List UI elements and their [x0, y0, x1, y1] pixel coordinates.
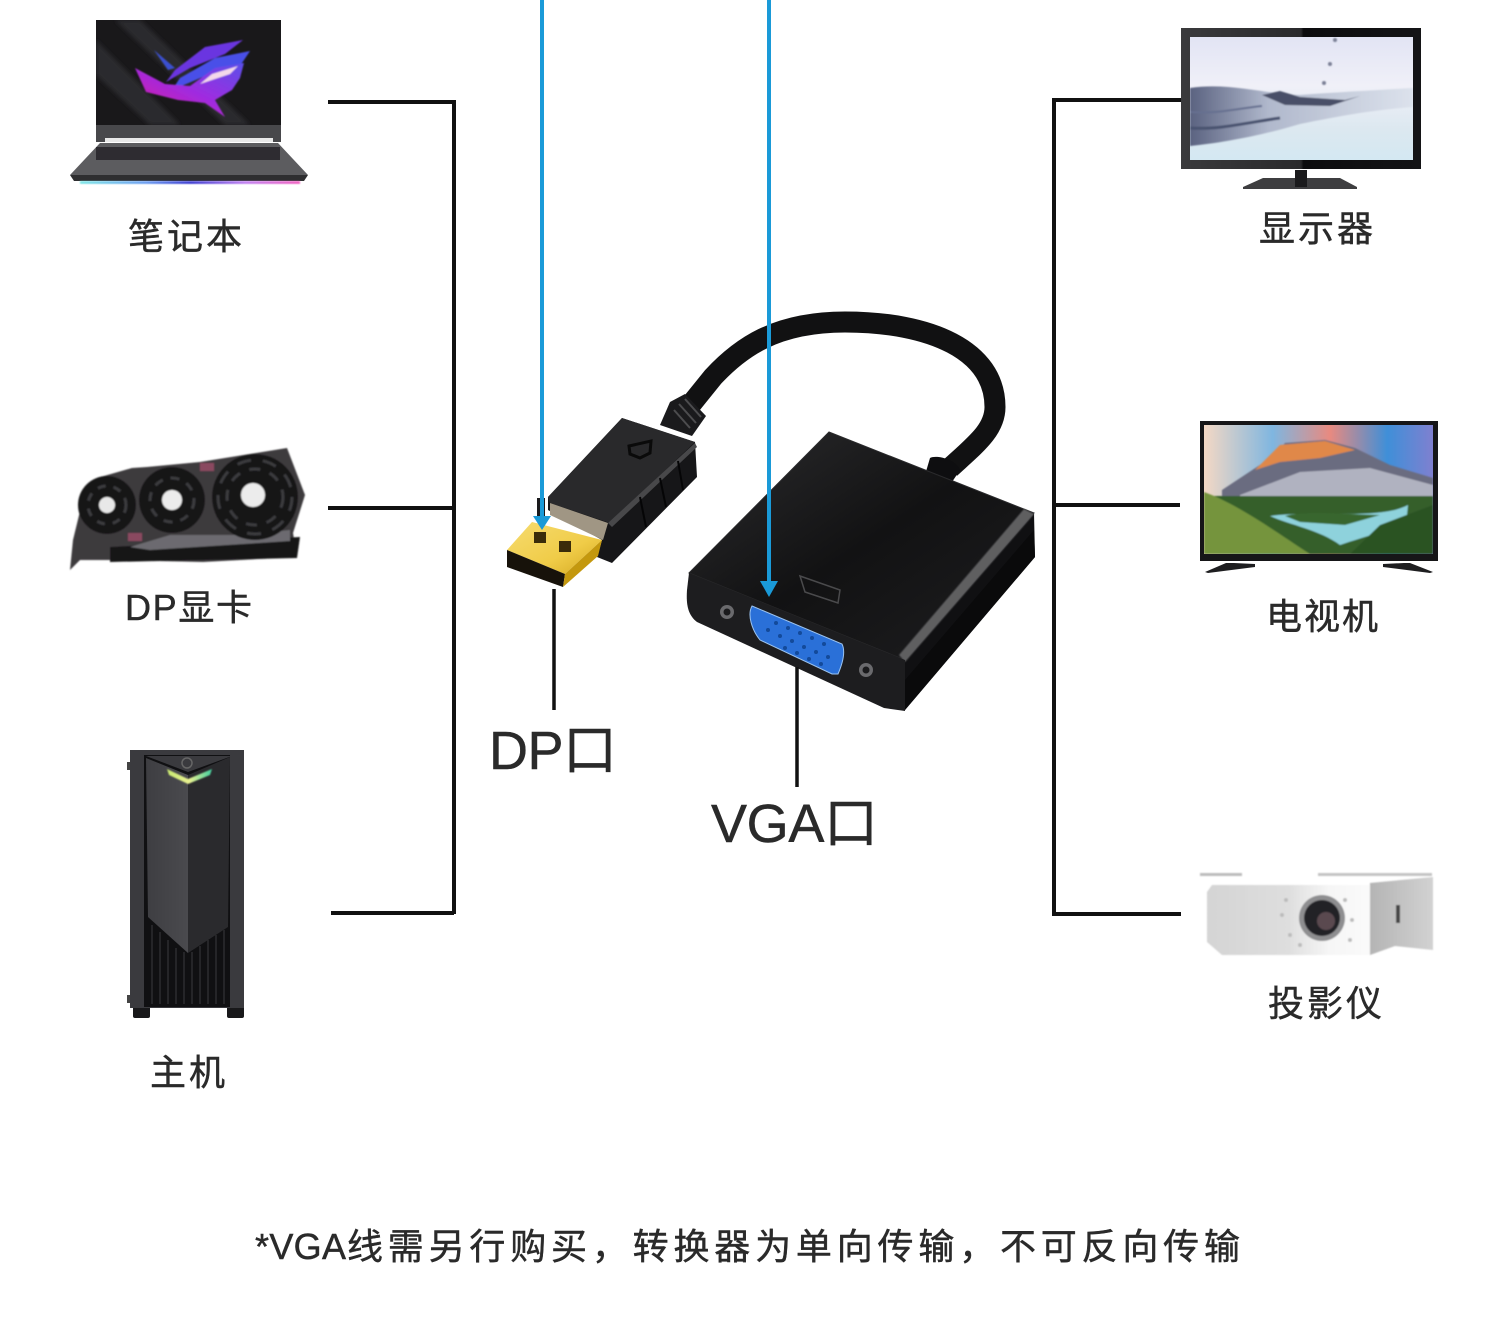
leader line: DP port	[552, 589, 556, 710]
icon: television	[1200, 421, 1438, 573]
label: 主机: 主机	[150, 1052, 225, 1093]
label: 电视机: 电视机	[1266, 596, 1378, 637]
cable	[688, 322, 995, 468]
icon: graphics card	[70, 448, 305, 570]
DP plug	[507, 394, 706, 587]
label: 笔记本: 笔记本	[128, 216, 242, 257]
VGA converter box	[687, 432, 1035, 711]
icon: projector	[1200, 873, 1433, 955]
label: DP显卡: DP显卡	[125, 587, 252, 628]
arrow: to VGA box	[760, 0, 778, 597]
label: 投影仪: 投影仪	[1268, 983, 1382, 1024]
label: VGA口: VGA口	[711, 794, 878, 854]
leader line: VGA port	[795, 667, 799, 787]
product: DP to VGA adapter	[507, 322, 1035, 711]
connector lines: source devices	[328, 102, 454, 914]
footnote: 线需另行购买，转换器为单向传输，不可反向传输	[347, 1226, 1240, 1267]
gold contact	[507, 522, 602, 574]
connector lines: display devices	[1054, 100, 1181, 914]
icon: laptop	[70, 20, 308, 184]
footnote: *VGA	[255, 1226, 346, 1267]
arrow: to DP plug	[533, 0, 551, 530]
icon: desktop tower	[127, 750, 244, 1018]
label: 显示器: 显示器	[1259, 208, 1373, 249]
label: DP口: DP口	[489, 721, 617, 781]
VGA port	[750, 606, 844, 674]
icon: monitor	[1181, 28, 1421, 189]
